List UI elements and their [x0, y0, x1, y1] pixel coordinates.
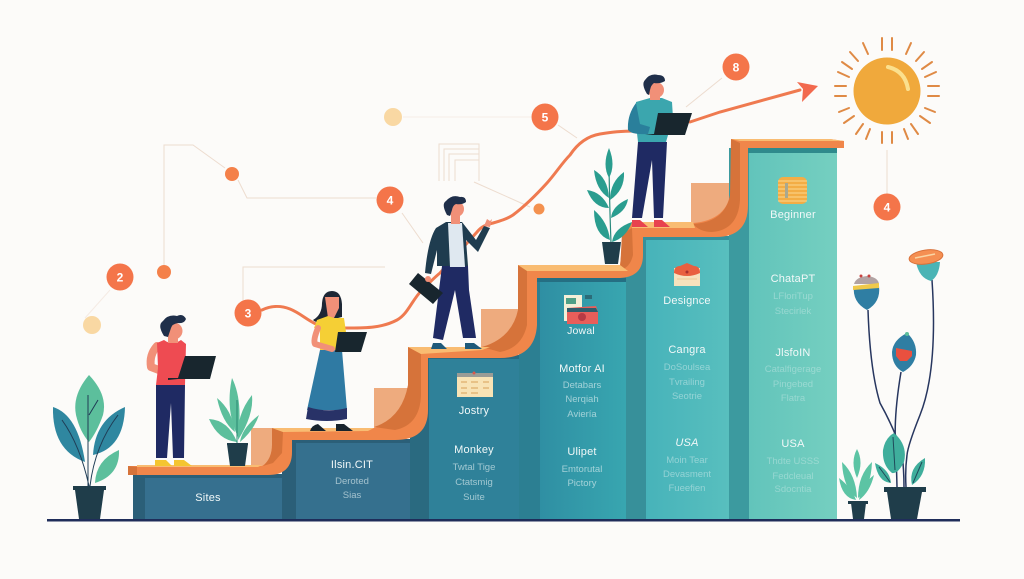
orange staircase ribbon	[128, 139, 844, 475]
text: block 5 labels	[663, 295, 711, 494]
badge 4 left: 4	[387, 194, 394, 208]
stair block 2	[282, 439, 430, 520]
growth curve arrow	[262, 82, 818, 328]
text: block 5 labels: Cangra	[668, 344, 706, 356]
text: block 2 labels	[331, 459, 373, 501]
flower: left bulb	[853, 274, 879, 310]
plant: small by person 1	[209, 378, 259, 466]
text: block 6 labels: Pingebed	[773, 379, 813, 390]
text: block 3 labels: Monkey	[454, 444, 494, 456]
text: block 4 labels: Ulipet	[567, 446, 597, 458]
text: block 6 labels: USA	[781, 438, 805, 450]
stair block 5	[626, 236, 749, 520]
text: block 6 labels: JlsfoIN	[775, 347, 811, 359]
badge 5	[532, 104, 558, 130]
text: block 4 labels: Emtorutal	[562, 464, 602, 475]
text: block 6 labels: Fedcleual	[772, 471, 814, 482]
icon: red folder	[564, 295, 598, 324]
icon: sun	[835, 38, 939, 143]
text: block 5 labels: Moin Tear	[666, 455, 708, 466]
text: block 6 labels: Stecirlek	[775, 306, 811, 317]
text: block 4 labels: Motfor AI	[559, 363, 605, 375]
text: block 3 labels: Jostry	[459, 405, 490, 417]
text: block 4 labels	[559, 325, 605, 489]
text: block 4 labels: Nerqiah	[565, 394, 599, 405]
small dots	[83, 108, 544, 334]
stair block 6	[729, 148, 837, 520]
person 4: teal shirt on top step	[628, 75, 692, 227]
stair block 4	[519, 277, 646, 520]
text: block 4 labels: Aviería	[567, 409, 597, 420]
text: block 6 labels	[765, 209, 821, 495]
person 3: dark jacket with tablet	[409, 196, 492, 349]
beige boxes behind stairs	[251, 183, 733, 466]
plant: small right	[839, 449, 874, 519]
text: block 5 labels: USA	[675, 437, 699, 449]
person 2: yellow shirt and blue skirt	[306, 291, 367, 431]
text: block 4 labels: Jowal	[567, 325, 595, 337]
stair block 1	[133, 474, 283, 520]
label: Sites: Sites	[195, 492, 221, 504]
text: block 6 labels: LFloriTup	[773, 291, 813, 302]
text: block 3 labels: Suite	[463, 492, 485, 503]
text: block 3 labels	[453, 405, 495, 503]
icon: nested square outline	[439, 144, 479, 181]
text: block 2 labels: Ilsin.CIT	[331, 459, 373, 471]
text: block 3 labels: Twtal Tige	[453, 462, 495, 473]
badge 2: 2	[117, 270, 124, 284]
text: block 5 labels: Tvrailing	[669, 377, 705, 388]
text: block 4 labels: Pictory	[567, 478, 597, 489]
badge 5: 5	[542, 110, 549, 124]
text: block 3 labels: Ctatsmig	[455, 477, 493, 488]
text: block 6 labels: Beginner	[770, 209, 816, 221]
badge 2	[106, 264, 134, 290]
person 1: red tank with laptop	[151, 315, 216, 466]
badge 8	[722, 54, 750, 80]
badge 4 right	[874, 194, 900, 220]
flower: right bulb	[908, 248, 944, 281]
badge 4 left	[376, 186, 404, 214]
text: block 5 labels: Devasment	[663, 469, 711, 480]
flower: middle bulb	[892, 332, 916, 372]
badge 3: 3	[245, 306, 252, 320]
icon: coin stack	[778, 177, 807, 204]
text: block 6 labels: Thdte USSS	[767, 456, 819, 467]
text: block 6 labels: Flatra	[781, 393, 806, 404]
text: block 6 labels: Sdocntia	[775, 484, 812, 495]
badge 3	[234, 300, 262, 326]
text: block 6 labels: Catalfigerage	[765, 364, 821, 375]
text: block 5 labels: Seotrie	[672, 391, 702, 402]
ground line	[47, 519, 960, 522]
text: block 2 labels: Deroted	[335, 476, 369, 487]
text: block 4 labels: Detabars	[563, 380, 602, 391]
stair block 3	[410, 355, 540, 520]
text: block 5 labels: Fueefien	[669, 483, 705, 494]
badge 4 right: 4	[884, 200, 891, 214]
icon: calendar	[457, 372, 493, 397]
icon: envelope	[674, 263, 700, 286]
plant: large left	[53, 375, 125, 519]
connector lines	[85, 78, 887, 318]
badge 8: 8	[733, 60, 740, 74]
text: block 5 labels: DoSoulsea	[664, 362, 711, 373]
plant: teal by step 4	[587, 148, 632, 264]
text: block 2 labels: Sias	[343, 490, 361, 501]
text: block 5 labels: Designce	[663, 295, 711, 307]
plant: tall flowers with pot	[853, 248, 944, 519]
text: block 6 labels: ChataPT	[771, 273, 815, 285]
